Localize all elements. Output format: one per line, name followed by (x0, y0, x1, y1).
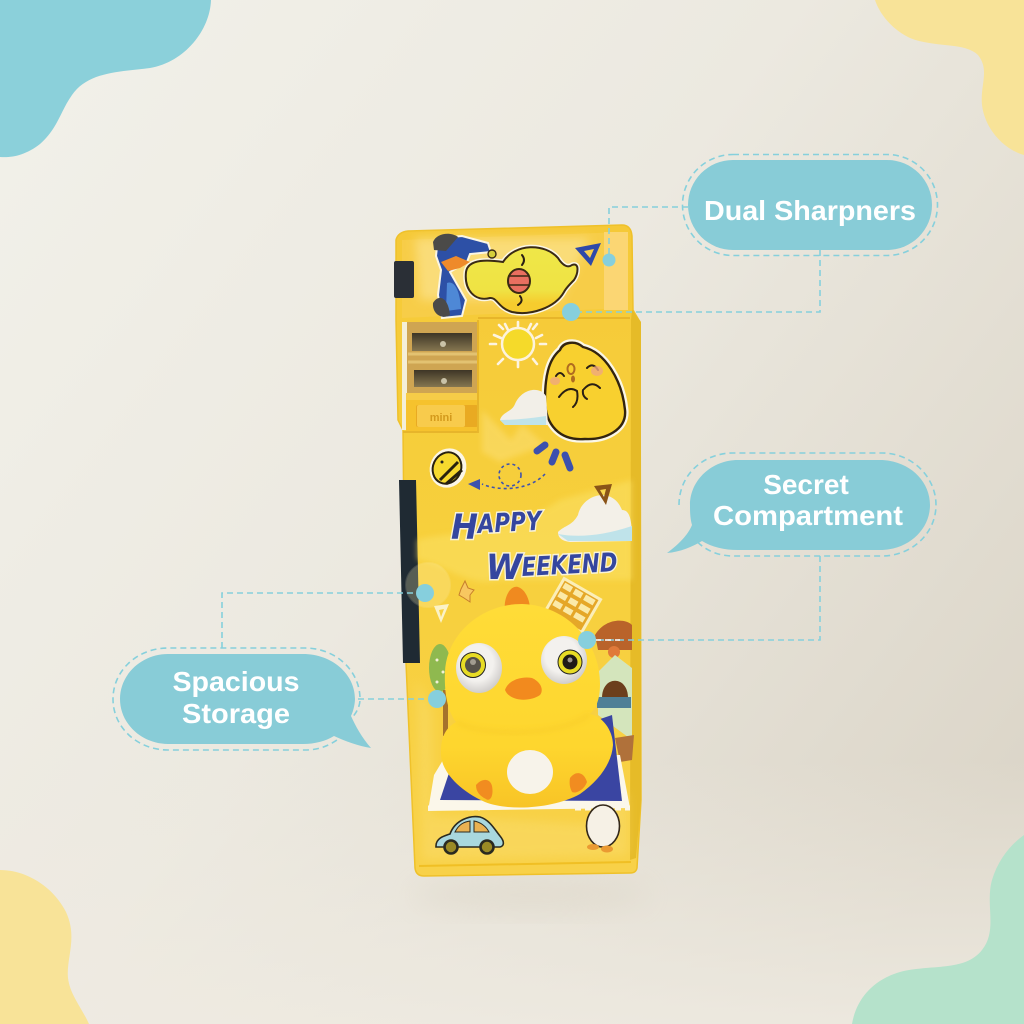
chick body (466, 247, 578, 313)
callout: Secret Compartment (667, 453, 936, 556)
duck comb (505, 587, 530, 614)
slide button (406, 400, 478, 432)
sharpener compartment (402, 322, 478, 432)
callout: Dual Sharpners (682, 154, 938, 256)
squishy duck toy (441, 587, 613, 808)
sticker: tree (429, 644, 451, 736)
title text: Happy Weekend: W (486, 548, 523, 588)
sticker: calendar window (545, 579, 601, 632)
corner blob: teal top-left (0, 0, 211, 157)
blue dashes (537, 445, 570, 468)
product: pencil box (394, 225, 641, 876)
title text: Happy Weekend: EEKEND (521, 548, 618, 583)
figure body (436, 236, 491, 318)
leader: Secret Compartment to toy (578, 556, 820, 649)
sharpener blade 2 (414, 370, 472, 387)
duck right foot (570, 773, 587, 793)
box lower sheen (416, 680, 628, 860)
duck left eye (456, 643, 502, 693)
sticker: sun (490, 322, 546, 367)
corner blob: green bottom-right (852, 835, 1024, 1024)
duck silhouette (441, 604, 613, 808)
callout: Secret Compartment: Secret (763, 469, 849, 500)
sticker: sleeping chick (545, 343, 625, 439)
sticker: chick hugging figure (433, 234, 578, 318)
sticker: car (436, 817, 503, 854)
dotted flight path and arrow (468, 464, 545, 490)
panel seam (403, 318, 630, 432)
sticker: egg bird (586, 805, 620, 852)
sticker: windmill house (595, 621, 634, 762)
title text: Happy Weekend (451, 507, 618, 588)
background hills and balloons (417, 480, 632, 582)
sticker: cloud with logo (558, 484, 632, 542)
corner blob: yellow bottom-left (0, 870, 89, 1024)
clip: upper black latch (394, 261, 414, 298)
small star and logo (459, 581, 474, 602)
callout: Dual Sharpners: Dual Sharpners (704, 195, 916, 226)
callout: Secret Compartment: Compartment (713, 500, 903, 531)
sticker: cloud upper (500, 390, 548, 425)
duck neck crease (456, 714, 590, 732)
callout: Spacious Storage: Storage (182, 698, 290, 729)
box bottom rim (419, 862, 631, 866)
title text: Happy Weekend: H (451, 508, 478, 548)
callout: Spacious Storage (113, 648, 371, 750)
corner blob: yellow top-right (875, 0, 1024, 155)
box right edge strip (630, 310, 641, 860)
top lid sheen (402, 232, 625, 318)
sticker: blue stamp (428, 715, 630, 811)
title text: Happy Weekend: APPY (475, 507, 545, 540)
leader: Dual Sharpners to lid (602, 207, 688, 266)
sticker: stamp edge (428, 806, 630, 810)
chick beak (508, 269, 530, 293)
box body (396, 225, 641, 876)
figure hand (441, 256, 470, 271)
callout: Spacious Storage: Spacious (172, 666, 300, 697)
sharpener compartment: mini (430, 412, 452, 424)
duck belly (507, 750, 553, 794)
duck beak (505, 678, 542, 700)
leader: Spacious Storage to black latch (222, 584, 434, 648)
clip: long black latch (399, 480, 420, 663)
logo mark: blue (575, 243, 601, 266)
sticker: mountain highlights (482, 410, 545, 462)
duck left foot (476, 780, 493, 800)
sharpener blade 1 (412, 333, 472, 351)
sharpener slot on lid (604, 232, 628, 310)
duck right eye (541, 636, 587, 684)
leader: Dual Sharpners to sharpener (562, 250, 820, 321)
sticker: bee (423, 442, 473, 494)
leader: Spacious Storage to box body (358, 690, 446, 708)
